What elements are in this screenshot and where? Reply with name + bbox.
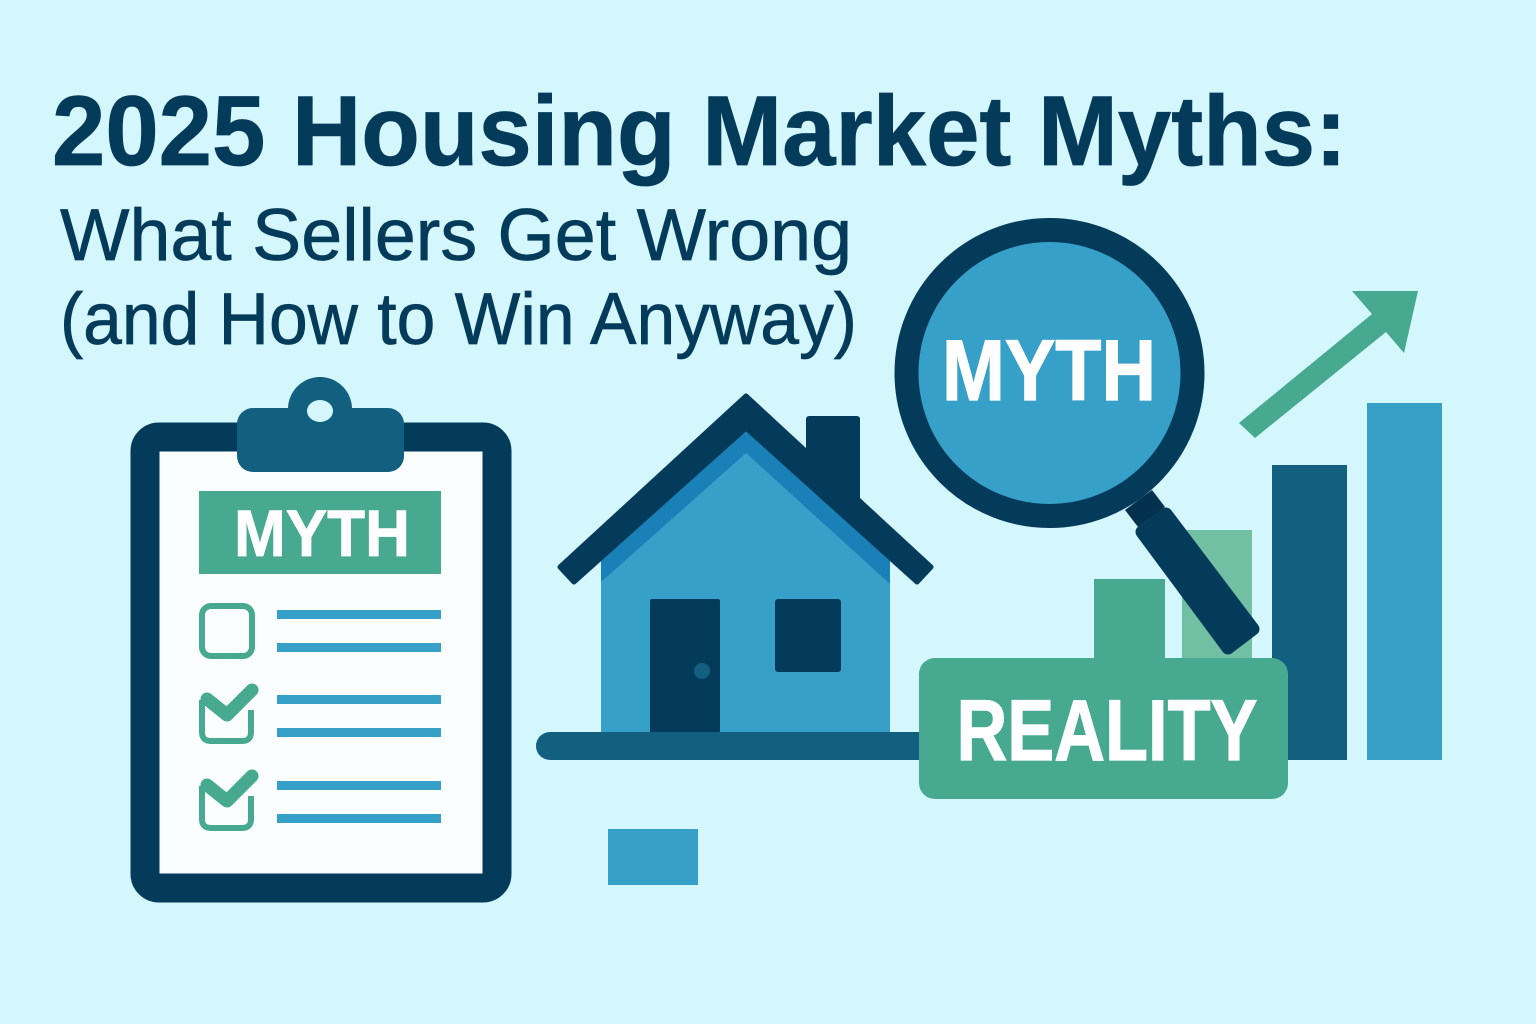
arrow: upward trend	[1239, 291, 1418, 438]
door	[650, 599, 720, 733]
checklist item 3	[202, 776, 441, 828]
title: 2025 Housing Market Myths:	[52, 75, 1347, 186]
window	[775, 599, 841, 672]
icon: magnifying glass	[906, 230, 1253, 648]
ground line	[536, 732, 936, 760]
icon: clipboard	[145, 377, 497, 888]
subtitle line 2: (and How to Win Anyway)	[60, 279, 857, 360]
icon: house	[536, 396, 936, 760]
subtitle line 1: What Sellers Get Wrong	[60, 195, 852, 276]
myth banner	[199, 491, 441, 574]
icon: magnifying glass: MYTH	[942, 323, 1156, 419]
small blue rectangle	[608, 829, 698, 885]
checklist item 2	[202, 690, 441, 741]
reality label	[919, 658, 1288, 799]
myth banner: MYTH	[234, 496, 410, 570]
reality label: REALITY	[956, 683, 1258, 779]
checklist item 1	[202, 606, 441, 656]
bar chart	[1094, 403, 1442, 760]
